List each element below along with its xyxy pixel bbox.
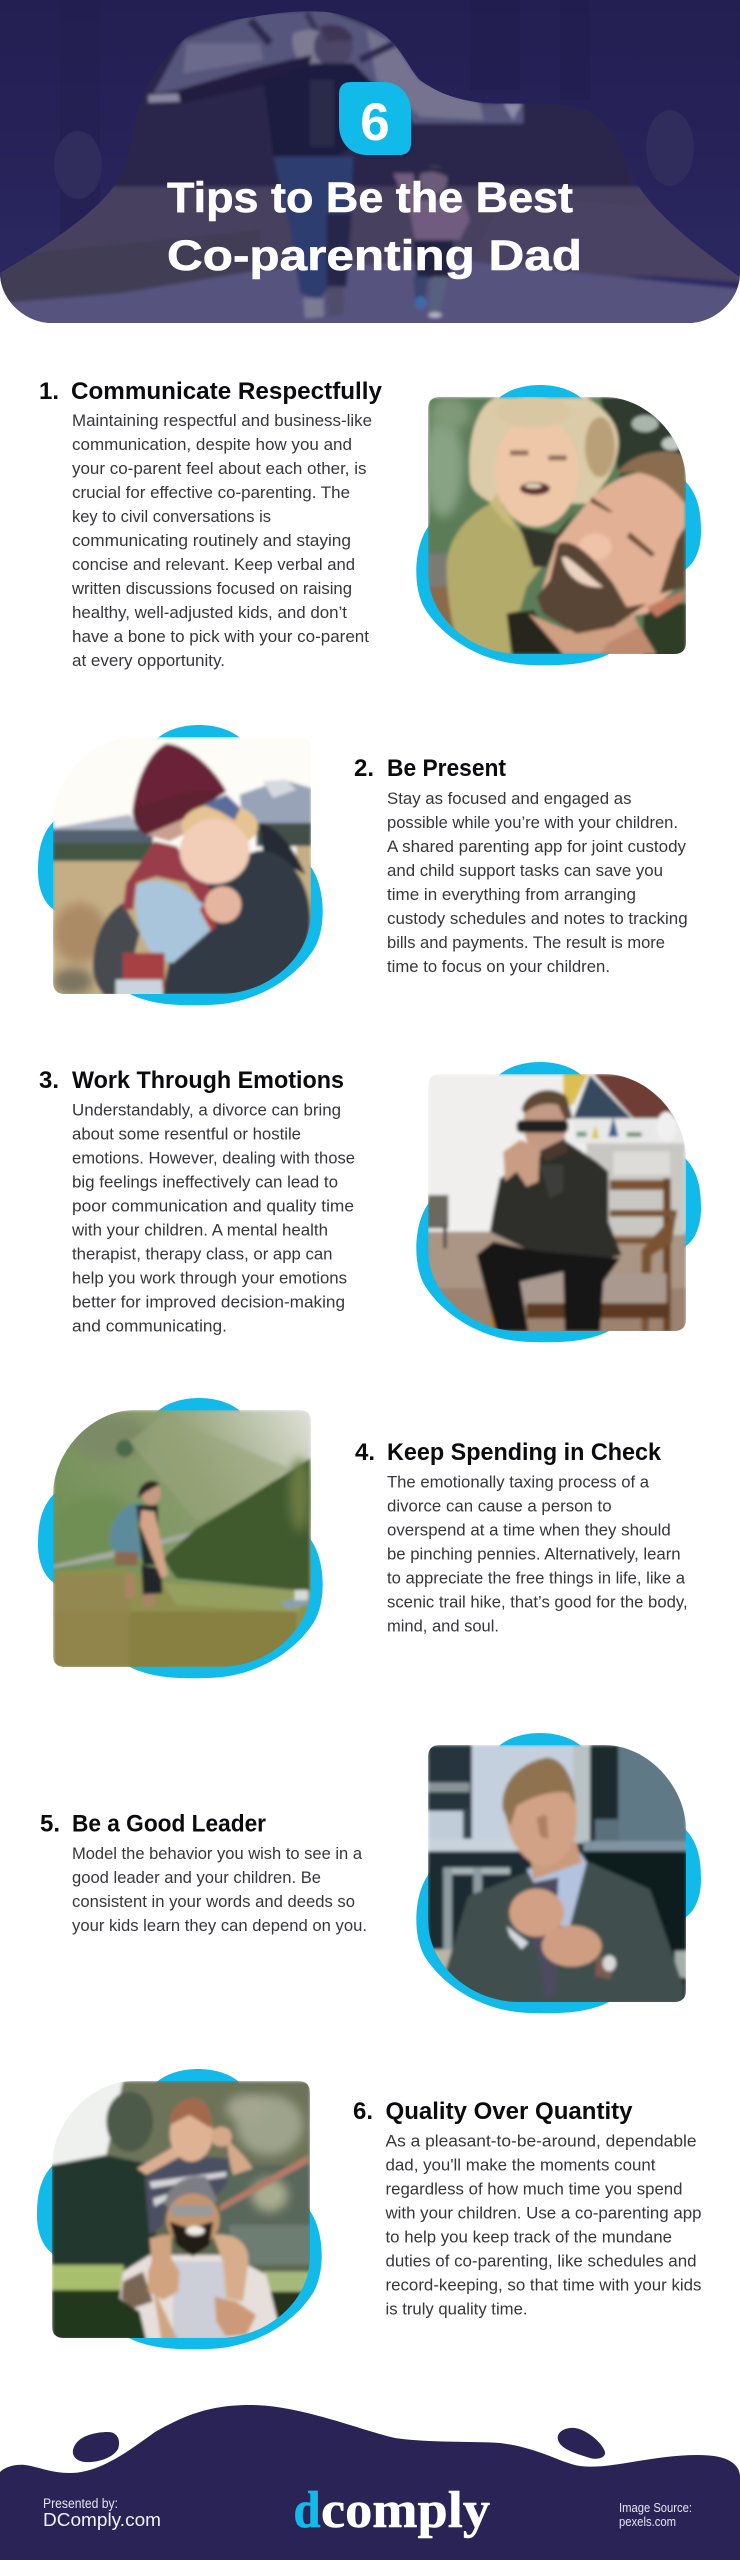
- panel: tip 3: [39, 1062, 701, 1342]
- text: tip 2 body: time to focus on your children.: [387, 958, 610, 976]
- text: tip 6 body: As a pleasant-to-be-around, dependable: [386, 2132, 696, 2150]
- badge: number 6: 6: [360, 93, 390, 152]
- text: tip 1 body: written discussions focused on raising: [71, 580, 352, 598]
- text: tip 6 body: dad, you'll make the moments count: [386, 2156, 656, 2174]
- text: tip 1 body: communicating routinely and staying: [72, 532, 351, 550]
- title: Co-parenting Dad: [167, 232, 582, 280]
- text: tip 1 body: at every opportunity.: [72, 652, 225, 670]
- text: tip 2 body: Stay as focused and engaged as: [387, 790, 632, 808]
- logo: dcomply: comply: [321, 2482, 490, 2539]
- photo: man seated in chair: [416, 1062, 701, 1342]
- text: tip 6 body: duties of co-parenting, like schedules and: [386, 2252, 696, 2270]
- text: tip 1 body: have a bone to pick with your co-parent: [72, 628, 369, 646]
- text: tip 5 body: Model the behavior you wish to see in a: [72, 1845, 363, 1863]
- text: tip 4 body: overspend at a time when they should: [387, 1522, 671, 1540]
- text: tip 3 body: and communicating.: [72, 1318, 227, 1336]
- text: tip 1 body: concise and relevant. Keep verbal and: [72, 556, 355, 574]
- footer wave: [0, 2405, 740, 2560]
- text: presented by: [43, 2496, 161, 2530]
- photo: father holding toddler: [38, 725, 323, 1005]
- text: tip 2 body: possible while you’re with your children.: [387, 814, 678, 832]
- text: tip 4 body: to appreciate the free things in life, like a: [387, 1570, 686, 1588]
- text: tip 4 body: divorce can cause a person to: [387, 1498, 612, 1516]
- text: tip 6 body: record-keeping, so that time with your kids: [386, 2276, 702, 2294]
- text: tip 1 body: crucial for effective co-parenting. The: [72, 484, 350, 502]
- text: tip 3 body: Understandably, a divorce can bring: [72, 1102, 341, 1120]
- heading: tip 5: 5.: [40, 1810, 60, 1838]
- header photo with navy overlay: [0, 0, 740, 333]
- text: tip 4 body: be pinching pennies. Alternatively, learn: [387, 1546, 681, 1564]
- panel: tip 5: [40, 1733, 701, 2013]
- panel: tip 2: [38, 725, 688, 1005]
- panel: tip 1: [39, 378, 701, 670]
- text: tip 5 body: consistent in your words and deeds so: [72, 1893, 355, 1911]
- logo: dcomply: d: [294, 2482, 321, 2539]
- heading: tip 6: Quality Over Quantity: [386, 2098, 633, 2125]
- decorative blob right: [558, 2428, 605, 2459]
- panel: footer: [0, 2405, 740, 2560]
- text: tip 3 body: emotions. However, dealing with those: [72, 1150, 355, 1168]
- photo: man in suit adjusting tie: [416, 1733, 701, 2013]
- text: tip 1 body: communication, despite how you and: [72, 436, 352, 454]
- photo: father and curly-haired child: [416, 385, 701, 665]
- text: tip 1 body: healthy, well-adjusted kids, and don’t: [72, 604, 347, 622]
- heading: tip 2: 2.: [354, 755, 374, 782]
- text: tip 3 body: with your children. A mental health: [71, 1222, 328, 1240]
- text: tip 1 body: key to civil conversations is: [72, 508, 271, 526]
- text: tip 3 body: [71, 1102, 355, 1336]
- heading: tip 5: Be a Good Leader: [72, 1810, 266, 1838]
- text: tip 6 body: with your children. Use a co-parenting app: [384, 2204, 702, 2222]
- decorative blob left: [73, 2432, 119, 2462]
- text: tip 4 body: [387, 1474, 688, 1636]
- text: tip 6 body: to help you keep track of the mundane: [386, 2228, 672, 2246]
- heading: tip 4: 4.: [355, 1439, 375, 1466]
- title: Tips to Be the Best: [167, 174, 573, 222]
- text: tip 4 body: The emotionally taxing process of a: [387, 1474, 650, 1492]
- text: tip 5 body: your kids learn they can depend on you.: [72, 1917, 367, 1935]
- photo: hiker in green valley: [38, 1398, 323, 1678]
- heading: tip 1: Communicate Respectfully: [71, 378, 383, 405]
- text: tip 1 body: your co-parent feel about each other, is: [72, 460, 366, 478]
- heading: tip 3: 3.: [39, 1067, 59, 1094]
- panel: header: [0, 0, 740, 333]
- panel: tip 6: [37, 2069, 702, 2349]
- text: tip 5 body: good leader and your children. Be: [72, 1869, 321, 1887]
- text: tip 4 body: mind, and soul.: [387, 1618, 499, 1636]
- text: tip 3 body: big feelings ineffectively can lead to: [72, 1174, 338, 1192]
- photo: child on father's shoulders: [37, 2069, 322, 2349]
- text: tip 6 body: [384, 2132, 702, 2318]
- text: tip 2 body: time in everything from arranging: [387, 886, 636, 904]
- title: [167, 174, 582, 280]
- text: tip 6 body: regardless of how much time you spend: [386, 2180, 682, 2198]
- text: presented by: Presented by:: [43, 2496, 118, 2511]
- text: tip 4 body: scenic trail hike, that’s good for the body,: [387, 1594, 688, 1612]
- text: tip 5 body: [72, 1845, 367, 1935]
- text: tip 3 body: better for improved decision-making: [72, 1294, 345, 1312]
- text: tip 1 body: Maintaining respectful and business-like: [72, 412, 372, 430]
- text: tip 2 body: [387, 790, 688, 976]
- heading: tip 2: Be Present: [387, 755, 506, 782]
- text: tip 2 body: A shared parenting app for joint custody: [387, 838, 687, 856]
- text: tip 3 body: therapist, therapy class, or app can: [72, 1246, 332, 1264]
- panel: tip 4: [38, 1398, 688, 1678]
- heading: tip 1: 1.: [39, 378, 59, 405]
- text: image source: Image Source:: [619, 2500, 692, 2515]
- text: presented by: DComply.com: [43, 2510, 161, 2530]
- text: image source: [619, 2500, 692, 2529]
- text: tip 3 body: help you work through your emotions: [72, 1270, 347, 1288]
- text: tip 6 body: is truly quality time.: [386, 2300, 528, 2318]
- text: tip 1 body: [71, 412, 372, 670]
- heading: tip 6: 6.: [353, 2098, 373, 2125]
- text: tip 3 body: poor communication and quality time: [72, 1198, 354, 1216]
- text: tip 2 body: custody schedules and notes to tracking: [387, 910, 688, 928]
- badge: number 6: [339, 82, 411, 155]
- text: tip 2 body: bills and payments. The result is more: [387, 934, 665, 952]
- text: tip 3 body: about some resentful or hostile: [72, 1126, 301, 1144]
- text: image source: pexels.com: [619, 2514, 676, 2529]
- heading: tip 4: Keep Spending in Check: [387, 1439, 662, 1466]
- text: tip 2 body: and child support tasks can save you: [387, 862, 663, 880]
- heading: tip 3: Work Through Emotions: [72, 1067, 344, 1094]
